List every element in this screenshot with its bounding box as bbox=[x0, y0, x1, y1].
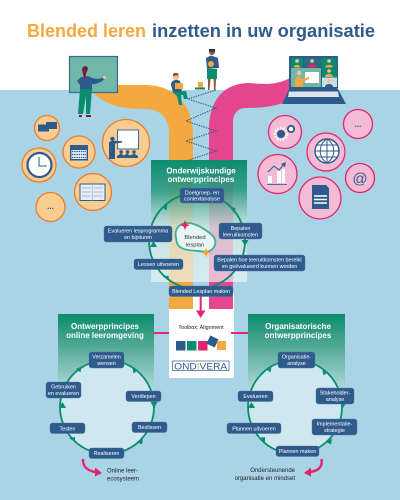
label: Plannen maken bbox=[279, 449, 316, 455]
label: Evalueren lesprogramma bbox=[108, 228, 168, 234]
label line 2: en geëvalueerd kunnen worden bbox=[222, 264, 297, 270]
step: stakeholder bbox=[316, 388, 354, 404]
circle bbox=[299, 177, 341, 219]
seated student bbox=[171, 73, 188, 105]
circle bbox=[346, 164, 374, 192]
books on floor bbox=[195, 82, 205, 90]
orange object bbox=[208, 61, 214, 67]
logo: OND IVERA bbox=[174, 361, 227, 371]
circle bbox=[258, 154, 297, 194]
teacher hair bbox=[82, 66, 88, 81]
icon: speech bubbles bbox=[34, 116, 60, 140]
label: Plannen uitvoeren bbox=[232, 426, 276, 432]
hair bbox=[209, 49, 215, 52]
heading line 1: Ontwerpprincipes bbox=[71, 322, 140, 331]
head bbox=[173, 74, 179, 80]
ellipsis: ... bbox=[355, 120, 361, 129]
grid bbox=[72, 150, 86, 159]
hair bbox=[173, 73, 179, 76]
panel background bbox=[58, 314, 154, 398]
board bbox=[70, 56, 118, 92]
participants shirt blue bbox=[325, 84, 333, 87]
gear halo bbox=[275, 128, 287, 140]
right middle tile bbox=[322, 68, 337, 77]
swatch blue bbox=[176, 341, 186, 350]
line 2: ecosysteem bbox=[107, 476, 139, 482]
book lines bbox=[82, 184, 103, 200]
sparkle pink bbox=[180, 220, 190, 230]
central blob bbox=[176, 223, 215, 252]
box bbox=[312, 419, 357, 435]
book bbox=[80, 184, 105, 200]
swatch green bbox=[187, 341, 196, 350]
teacher shoes bbox=[79, 115, 91, 117]
step: lessen bbox=[134, 259, 183, 270]
label line 2: wensen bbox=[96, 361, 116, 367]
toolbox label: Toolbox: Alignment bbox=[178, 325, 224, 331]
label: Bepalen hoe leeruitkomsten bereikt bbox=[217, 258, 302, 264]
big gear bbox=[277, 130, 285, 138]
green book bbox=[195, 88, 205, 90]
step: doelgroep bbox=[180, 188, 224, 203]
line 1: Onderwijskundige bbox=[166, 166, 236, 176]
circle fill bbox=[248, 360, 342, 454]
step: organisatie bbox=[278, 352, 315, 368]
bubbles bbox=[38, 122, 57, 132]
torso bbox=[206, 56, 219, 69]
step: blended lesplan maken bbox=[169, 286, 233, 296]
step: implementatie bbox=[312, 419, 357, 435]
icon: clock bbox=[22, 148, 56, 182]
circle fill bbox=[60, 360, 154, 454]
label: Realiseren bbox=[94, 451, 119, 457]
icon: gears bbox=[268, 116, 302, 148]
teacher hand bbox=[103, 76, 106, 79]
arrow left bbox=[144, 330, 169, 336]
box bbox=[214, 255, 305, 271]
base bbox=[282, 89, 346, 104]
step: beslissen bbox=[132, 422, 167, 432]
left icons group bbox=[22, 116, 150, 222]
icon: presenter bbox=[102, 120, 150, 166]
audience bbox=[117, 154, 138, 158]
panel: ontwerpprincipes online leeromgeving bbox=[46, 314, 167, 482]
clock hands bbox=[39, 157, 47, 166]
title bbox=[27, 21, 375, 41]
line 2: lesplan bbox=[186, 242, 204, 248]
label line 2: contextanalyse bbox=[184, 196, 220, 202]
curved arrow bbox=[83, 459, 96, 472]
legs bbox=[172, 91, 188, 105]
cycle arrows bbox=[150, 204, 248, 290]
orange band bbox=[92, 85, 193, 309]
legs bbox=[208, 79, 216, 90]
box bbox=[89, 352, 124, 368]
grid cells bbox=[72, 152, 86, 158]
pink band bbox=[209, 78, 290, 309]
icon: calendar bbox=[63, 136, 95, 168]
participants shirts orange bbox=[294, 65, 333, 77]
shorts bbox=[207, 69, 217, 79]
box bbox=[219, 223, 262, 239]
top left tile bbox=[291, 58, 303, 68]
circle bbox=[34, 116, 60, 140]
calendar bbox=[70, 145, 88, 160]
label line 2: leeruitkomsten bbox=[223, 232, 258, 238]
arrow head bbox=[281, 162, 286, 167]
step: testen bbox=[50, 423, 85, 434]
screen bbox=[118, 130, 138, 149]
arrow head bbox=[95, 468, 102, 476]
presenter bbox=[295, 76, 309, 87]
panel: onderwijskundige ontwerpprincipes bbox=[104, 166, 305, 296]
step: bepalen bbox=[219, 223, 262, 239]
label line 2: analyse bbox=[287, 361, 306, 367]
box bbox=[276, 446, 319, 456]
dotted zigzag bbox=[186, 90, 216, 161]
label: Beslissen bbox=[138, 425, 161, 431]
panel: toolbox bbox=[172, 325, 229, 371]
orange book bbox=[198, 82, 203, 88]
step: bepalen hoe bbox=[214, 255, 305, 271]
center panel background bbox=[151, 160, 247, 282]
arrow right bbox=[231, 330, 258, 336]
title part: orange: Blended leren bbox=[27, 21, 146, 41]
step: evalueren bbox=[238, 391, 273, 402]
sparkle orange bbox=[201, 248, 211, 258]
label: Verzamelen bbox=[92, 354, 121, 360]
caption bbox=[107, 468, 139, 482]
panel: organisatorische ontwerpprincipes bbox=[227, 314, 357, 482]
step: verzamelen bbox=[89, 352, 124, 368]
trend arrow bbox=[268, 163, 285, 172]
cycle arrows bbox=[248, 366, 346, 444]
circle bbox=[307, 133, 345, 171]
head bbox=[110, 137, 115, 141]
participants shirts pink bbox=[308, 64, 316, 68]
book bbox=[175, 83, 183, 89]
circle bbox=[268, 116, 302, 148]
box bbox=[89, 448, 124, 458]
box bbox=[238, 391, 273, 402]
box bbox=[316, 388, 354, 404]
step: gebruiken bbox=[46, 382, 81, 398]
arrow down to toolbox bbox=[196, 296, 206, 318]
label: Gebruiken bbox=[51, 384, 76, 390]
label: Organisatie- bbox=[282, 354, 311, 360]
line 1: Online leer- bbox=[107, 468, 138, 474]
cycle bbox=[149, 193, 245, 289]
head bbox=[209, 49, 215, 55]
circle bbox=[102, 120, 150, 166]
torso bbox=[171, 80, 182, 92]
participant heads bbox=[297, 61, 329, 81]
line 1: Ondersteunende bbox=[250, 468, 296, 474]
audience heads bbox=[121, 150, 134, 154]
curved arrow bbox=[310, 459, 322, 472]
teacher legs bbox=[78, 89, 92, 114]
step: verdiepen bbox=[126, 391, 161, 402]
person bbox=[109, 141, 122, 159]
icon: globe bbox=[307, 133, 345, 171]
label: Testen bbox=[60, 426, 75, 432]
title part: blue: inzetten in uw organisatie bbox=[152, 21, 375, 41]
top right tile bbox=[321, 58, 337, 68]
circle bbox=[36, 192, 65, 222]
label line 2: en evalueren bbox=[48, 391, 79, 397]
laptop bbox=[282, 56, 346, 104]
label line 2: analyse bbox=[326, 397, 344, 403]
screen bbox=[289, 56, 338, 89]
step: plannen uitvoeren bbox=[227, 423, 281, 434]
page bbox=[312, 185, 329, 209]
line 2: ontwerpprincipes bbox=[168, 175, 235, 184]
label: Evalueren bbox=[243, 394, 268, 400]
swatch orange bbox=[217, 341, 226, 350]
swatch pink bbox=[198, 341, 208, 350]
at: @ bbox=[352, 170, 368, 188]
circle bbox=[22, 148, 56, 182]
heading line 2: online leeromgeving bbox=[66, 331, 144, 340]
band end pink bbox=[209, 282, 233, 309]
box bbox=[104, 226, 172, 242]
box bbox=[50, 423, 85, 434]
box bbox=[180, 188, 224, 203]
right icons group bbox=[258, 110, 374, 219]
box bbox=[134, 259, 183, 270]
white toolbox panel bbox=[169, 292, 234, 378]
step: realiseren bbox=[89, 448, 124, 458]
circle bbox=[344, 110, 372, 138]
box bbox=[278, 352, 315, 368]
box bbox=[227, 423, 281, 434]
heading bbox=[166, 166, 236, 184]
circle bbox=[74, 174, 112, 210]
standing student bbox=[206, 49, 219, 90]
top middle tile bbox=[304, 58, 320, 68]
arrow head bbox=[304, 468, 311, 476]
keyboard bbox=[288, 92, 339, 97]
text lines bbox=[314, 196, 327, 203]
heading line 1: Organisatorische bbox=[265, 322, 331, 331]
clock face bbox=[28, 153, 52, 177]
line 1: Blended bbox=[184, 235, 206, 241]
main tile bbox=[291, 68, 321, 87]
label: Bepalen bbox=[231, 226, 250, 232]
icon: book bbox=[74, 174, 112, 210]
caption bbox=[235, 468, 296, 482]
label: Doelgroep- en bbox=[185, 190, 219, 196]
label line 2: en bijsturen bbox=[124, 235, 152, 241]
blob label bbox=[184, 235, 206, 248]
panel background bbox=[248, 314, 345, 398]
heading line 2: ontwerpprincipes bbox=[265, 331, 332, 340]
step: plannen maken bbox=[276, 446, 319, 456]
teacher body bbox=[77, 76, 105, 90]
label: Lessen uitvoeren bbox=[138, 262, 179, 268]
box bbox=[169, 286, 233, 296]
box bbox=[46, 382, 81, 398]
cycle arrows bbox=[59, 366, 158, 444]
axis bbox=[267, 183, 287, 186]
label: Blended Lesplan maken bbox=[172, 289, 230, 295]
label: Implementatie- bbox=[317, 422, 353, 428]
small gear bbox=[288, 126, 294, 132]
band end orange bbox=[169, 282, 193, 309]
ellipsis: ... bbox=[47, 202, 54, 211]
logo frame bbox=[172, 361, 229, 370]
icon: document bbox=[299, 177, 341, 219]
right bottom tile bbox=[322, 78, 337, 87]
line 2: organisatie en mindset bbox=[235, 476, 295, 482]
icon: chart bbox=[258, 154, 297, 194]
presenter head bbox=[297, 71, 301, 75]
globe outline bbox=[315, 139, 339, 163]
label: Stakeholder- bbox=[320, 390, 350, 396]
step: evalueren bbox=[104, 226, 172, 242]
globe lines bbox=[315, 139, 339, 163]
swatch rotated blue bbox=[207, 336, 218, 347]
lesson board bbox=[305, 72, 319, 83]
label line 2: strategie bbox=[324, 428, 345, 434]
box bbox=[126, 391, 161, 402]
label: Verdiepen bbox=[131, 394, 156, 400]
teacher with board bbox=[70, 56, 118, 117]
circle bbox=[63, 136, 95, 168]
bars bbox=[268, 169, 285, 183]
box bbox=[132, 422, 167, 432]
